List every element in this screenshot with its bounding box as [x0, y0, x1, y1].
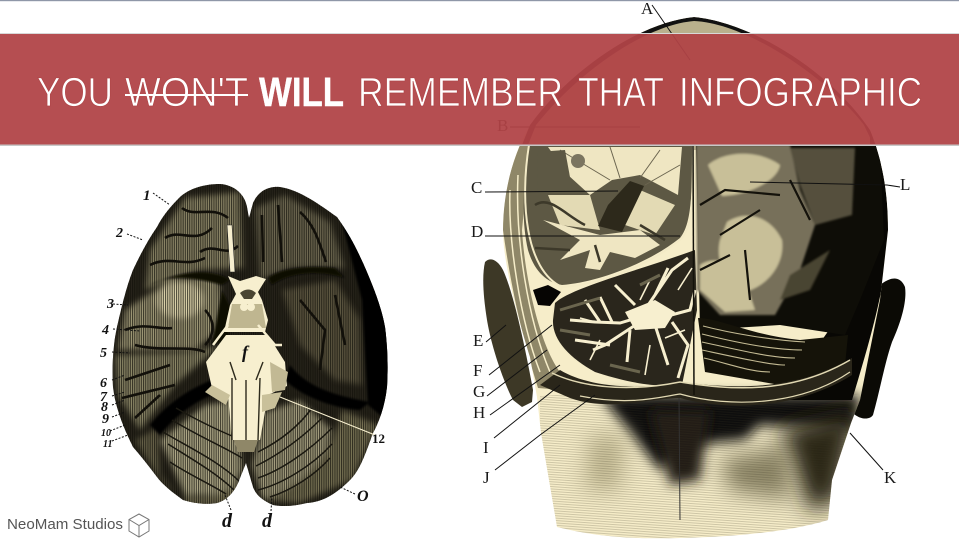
right cerebellum stripes	[698, 318, 848, 385]
title	[37, 69, 922, 115]
white matter	[535, 147, 682, 270]
cerebellum folds	[163, 408, 332, 497]
brain callout numbers	[100, 188, 385, 532]
title: WON'T	[125, 69, 248, 115]
banner	[0, 33, 959, 146]
brain callout numbers: d	[262, 510, 273, 532]
brain callout numbers: 1	[143, 188, 150, 204]
neck shading	[540, 395, 860, 540]
ventricle dark spot	[598, 181, 644, 232]
skull upper dome	[520, 17, 880, 150]
brain callout numbers: 6	[100, 376, 107, 391]
skull band	[503, 146, 559, 389]
anatomy letter labels and leader lines: I	[483, 438, 489, 457]
title: WILL	[259, 69, 344, 115]
brainstem	[205, 225, 375, 452]
anatomy letter labels and leader lines: H	[473, 403, 485, 422]
hatching	[105, 180, 395, 510]
anatomy letter labels and leader lines	[471, 0, 910, 487]
left hemisphere section	[524, 145, 693, 285]
brain silhouette	[113, 184, 388, 506]
illustration: brain underside	[100, 180, 395, 532]
brain callout numbers: 9	[102, 412, 109, 427]
left cerebellum section	[553, 250, 697, 386]
title: REMEMBER	[358, 69, 563, 115]
illustration: head cross-section	[471, 0, 910, 540]
top edge line	[0, 0, 959, 1]
brain callout numbers: 8	[101, 400, 108, 415]
gyri grooves	[122, 205, 345, 418]
brain callout numbers: 5	[100, 346, 107, 361]
dark sinus	[533, 285, 561, 306]
anatomy letter labels and leader lines: C	[471, 178, 482, 197]
brain callout numbers: 10	[101, 428, 111, 439]
brain callout numbers: 3	[106, 297, 114, 312]
brand name: NeoMam Studios	[7, 516, 123, 533]
right hemisphere	[696, 145, 884, 335]
anatomy letter labels and leader lines: F	[473, 361, 482, 380]
brain tonal shading	[105, 180, 395, 510]
anatomy letter labels and leader lines: E	[473, 331, 483, 350]
brain callout numbers: 7	[100, 390, 108, 405]
anatomy letter labels and leader lines: J	[483, 468, 490, 487]
anatomy letter labels and leader lines: B	[497, 116, 508, 135]
anatomy letter labels and leader lines: K	[884, 468, 897, 487]
brain callout numbers: 4	[101, 323, 109, 338]
title: THAT	[578, 69, 664, 115]
brain callout numbers: 11	[103, 439, 112, 450]
membrane lines	[525, 145, 693, 386]
anatomy letter labels and leader lines: L	[900, 175, 910, 194]
anatomy letter labels and leader lines: D	[471, 222, 483, 241]
skull base band	[540, 358, 852, 406]
brain callout numbers: f	[242, 342, 250, 362]
title: INFOGRAPHIC	[679, 69, 922, 115]
icon: cube	[129, 514, 149, 537]
brain callout numbers: d	[222, 510, 233, 532]
title: YOU	[37, 69, 113, 115]
head and neck silhouette	[503, 17, 888, 538]
cerebellum white matter tree	[560, 258, 695, 378]
brain callout numbers: O	[357, 488, 369, 505]
anatomy letter labels and leader lines: G	[473, 382, 485, 401]
dark right rim	[340, 222, 388, 417]
footer logo	[7, 514, 149, 537]
left ear	[483, 259, 533, 407]
brain callout numbers: 12	[372, 431, 385, 446]
brain callout numbers: 2	[115, 226, 123, 241]
right ear	[840, 278, 905, 419]
shadow bands	[150, 365, 370, 435]
